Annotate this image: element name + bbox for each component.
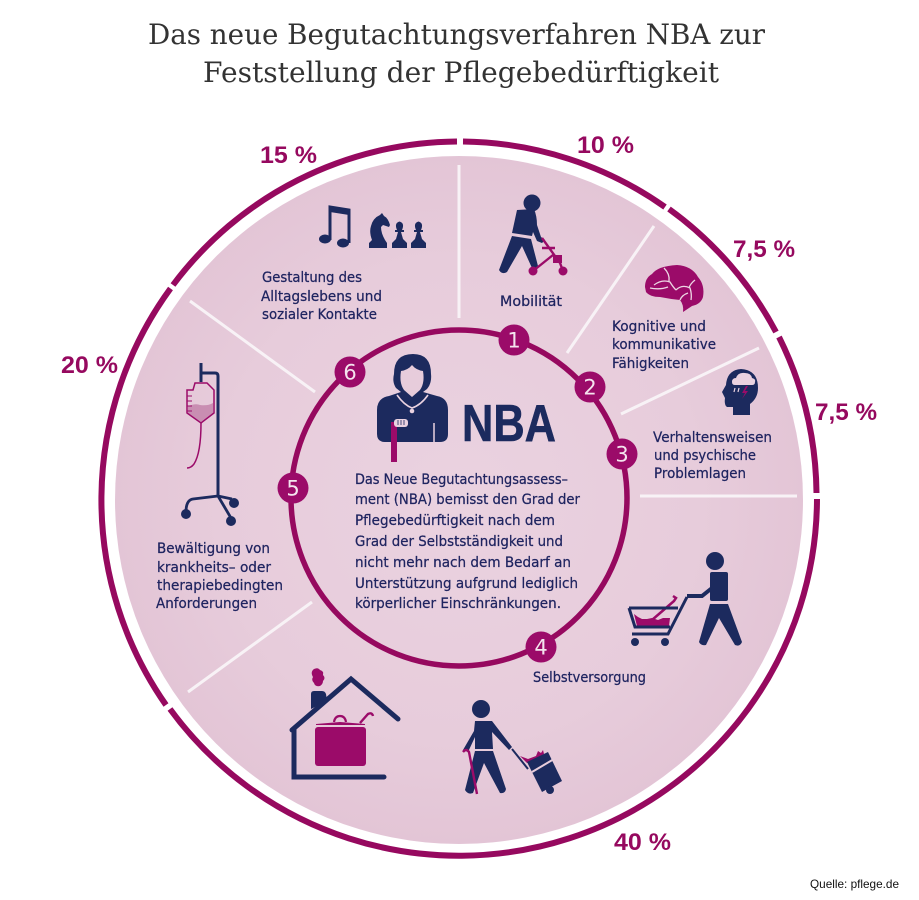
number badges: 2 [583, 376, 597, 400]
label: Bewältigung [156, 541, 283, 612]
label: Alltag: Gestaltung des [262, 270, 362, 286]
icon: walker person [499, 194, 568, 276]
text: description: ment (NBA) bemisst den Grad der [355, 492, 580, 508]
text: description: Unterstützung aufgrund lediglich [355, 576, 578, 592]
number badges: 4 [534, 636, 548, 660]
percentage labels: 40 % [614, 829, 671, 856]
number badges: 1 [507, 328, 521, 352]
text: description: Grad der Selbstständigkeit und [355, 534, 563, 550]
icon: chess pieces [369, 213, 426, 248]
label: Bewältigung: krankheits– oder [157, 560, 271, 576]
label: Bewältigung: therapiebedingten [157, 578, 283, 594]
label: Kognitive: Kognitive und [612, 319, 706, 335]
label: Alltag: sozialer Kontakte [262, 307, 377, 323]
title: Das neue Begutachtungsverfahren NBA zur [148, 18, 766, 51]
icon: person with cane and trolley [463, 700, 562, 794]
title [148, 18, 766, 89]
text: description: nicht mehr nach dem Bedarf an [355, 555, 571, 571]
label: Bewältigung: Bewältigung von [157, 541, 270, 557]
inner ring [291, 330, 627, 666]
outer percentage ring [101, 142, 817, 856]
icon: infusion stand [181, 363, 239, 526]
NBA heading: NBA [462, 395, 556, 453]
label: Selbstversorgung: Selbstversorgung [533, 670, 646, 686]
number badges: 3 [615, 442, 629, 466]
label: Alltag [261, 270, 382, 323]
label: Kognitive [612, 319, 716, 372]
number badges: 6 [343, 360, 357, 384]
panel: pink disc [115, 156, 803, 844]
label: Kognitive: Fähigkeiten [612, 356, 689, 372]
label: Verhalten: Verhaltensweisen [653, 430, 772, 446]
label: Kognitive: kommunikative [612, 337, 716, 353]
icon: woman with cane [377, 354, 448, 462]
label: Alltag: Alltagslebens und [261, 289, 382, 305]
label: Verhalten: und psychische [654, 448, 756, 464]
icon: shopper with cart [629, 552, 742, 646]
text: description: körperlicher Einschränkungen. [355, 596, 561, 612]
percentage labels: 7,5 % [815, 399, 877, 426]
percentage labels: 20 % [61, 352, 118, 379]
number badges [278, 324, 638, 662]
label: Mobilität: Mobilität [500, 294, 562, 310]
label: Verhalten [653, 430, 772, 482]
label: Verhalten: Problemlagen [654, 466, 746, 482]
text: description: Das Neue Begutachtungsassess– [355, 472, 568, 488]
icon: house with pot [292, 668, 398, 777]
percentage labels [61, 132, 877, 856]
text: description [355, 472, 580, 612]
icon: music note [319, 206, 349, 248]
icon: brain [645, 265, 703, 312]
percentage labels: 7,5 % [733, 236, 795, 263]
title: Feststellung der Pflegebedürftigkeit [203, 56, 720, 89]
icon: head with storm [722, 369, 758, 415]
percentage labels: 15 % [260, 142, 317, 169]
percentage labels: 10 % [577, 132, 634, 159]
source: Quelle: pflege.de [810, 877, 899, 891]
text: description: Pflegebedürftigkeit nach dem [355, 513, 555, 529]
label: Bewältigung: Anforderungen [156, 596, 257, 612]
number badges: 5 [286, 476, 300, 500]
